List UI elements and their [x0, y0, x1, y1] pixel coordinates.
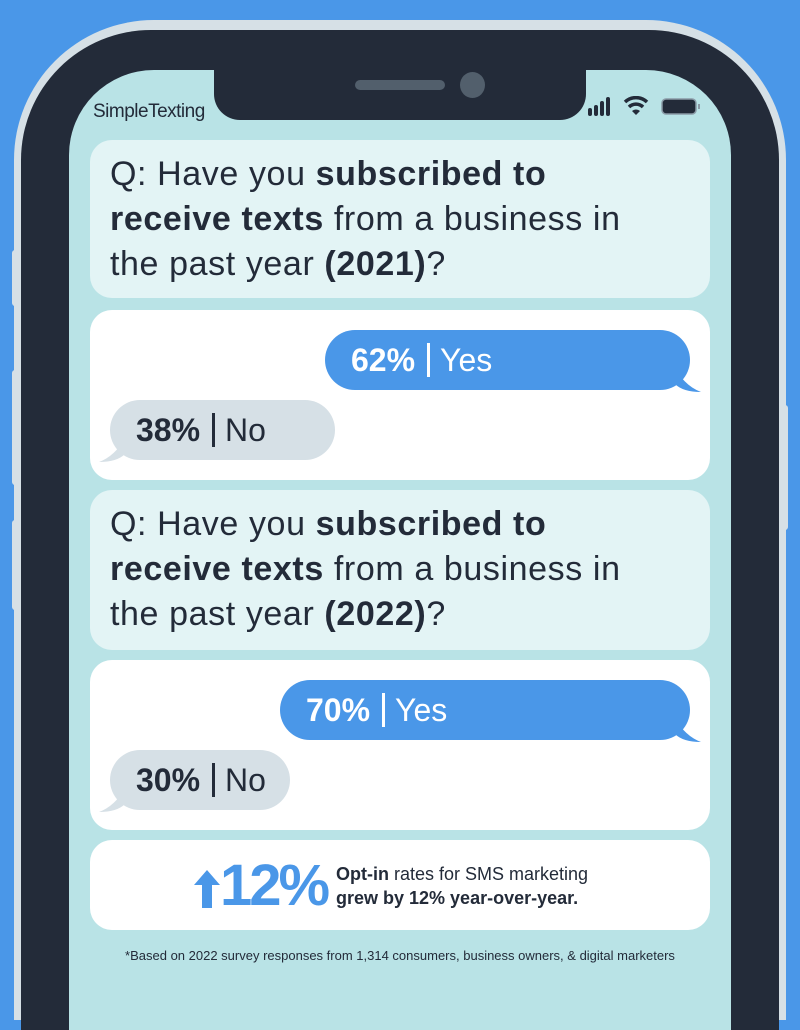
camera [460, 72, 485, 98]
big 12%: 12% [220, 853, 327, 918]
question 2021: Q: Have you subscribed to [110, 155, 546, 193]
stat text: Opt-in rates for SMS marketing [336, 864, 588, 884]
question 2021 [90, 140, 710, 298]
no bubble 30% [110, 750, 290, 810]
screen [69, 70, 731, 1030]
stat text [336, 864, 588, 908]
question 2021: receive texts from a business in [110, 200, 621, 238]
footnote: *Based on 2022 survey responses from 1,314 consumers, business owners, & digital marketers [125, 948, 675, 963]
up arrow icon [194, 870, 220, 908]
question 2022: the past year (2022)? [110, 595, 446, 633]
question 2022 [90, 490, 710, 650]
notch [214, 60, 586, 120]
side buttons [12, 250, 20, 306]
yes bubble 70% [280, 680, 690, 740]
speaker [355, 80, 445, 90]
stat callout [90, 840, 710, 930]
answers 2022 [90, 660, 710, 830]
question 2022: Q: Have you subscribed to [110, 505, 546, 543]
yes bubble 62%: 62% Yes [351, 342, 492, 378]
no bubble 38% [110, 400, 335, 460]
status icons [588, 96, 700, 116]
logo: SimpleTexting [93, 101, 205, 122]
no bubble 30%: 30% No [136, 762, 266, 798]
yes bubble 70%: 70% Yes [306, 692, 447, 728]
yes bubble 62% [325, 330, 690, 390]
answers 2021 [90, 310, 710, 480]
question 2022: receive texts from a business in [110, 550, 621, 588]
question 2021: the past year (2021)? [110, 245, 446, 283]
stat text: grew by 12% year-over-year. [336, 888, 578, 908]
no bubble 38%: 38% No [136, 412, 266, 448]
